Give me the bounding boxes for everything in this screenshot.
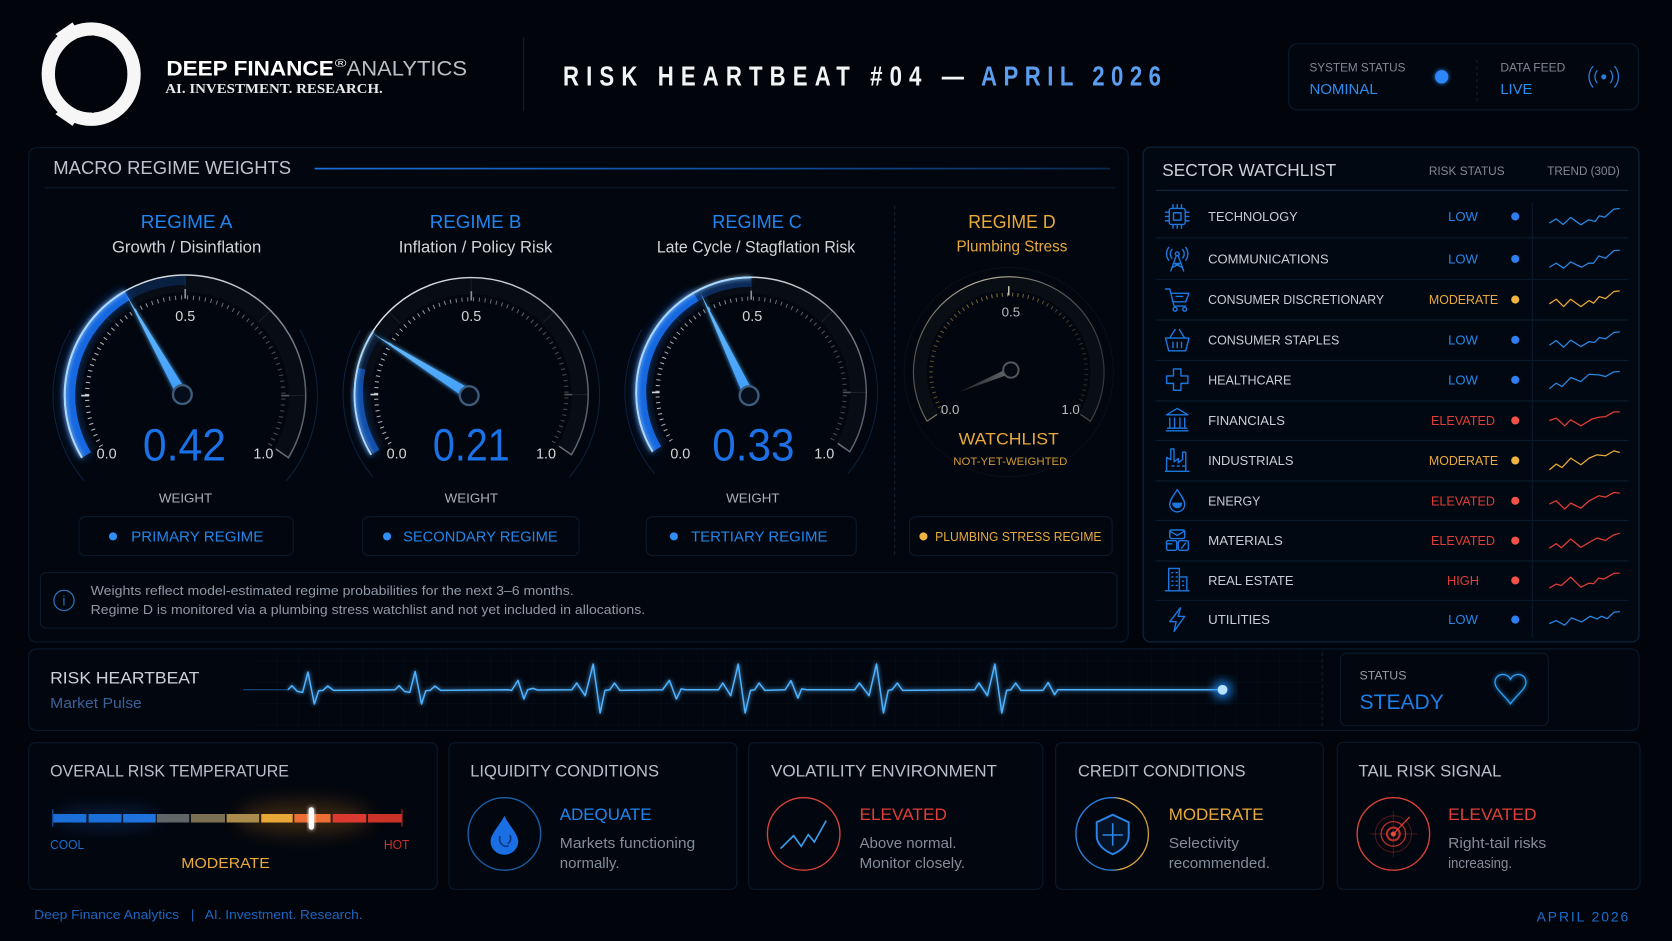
icon: credit shield	[1076, 798, 1148, 870]
gauge: regime D	[904, 212, 1113, 556]
panel: system status: NOMINAL	[1309, 81, 1378, 98]
panel: overall risk temperature: COOL	[50, 837, 84, 852]
row: energy: ENERGY	[1208, 493, 1261, 508]
heading: risk heartbeat: RISK HEARTBEAT	[50, 669, 200, 688]
gauge: regime C: 0.0	[670, 447, 690, 463]
row: technology: TECHNOLOGY	[1208, 209, 1298, 224]
footer: APRIL 2026	[1537, 908, 1629, 924]
row: consumer discretionary	[1165, 289, 1620, 311]
icon: fuel drop	[1170, 489, 1185, 512]
panel: volatility environment	[749, 743, 1043, 889]
note: weights explanation: Weights reflect model-estimated regime probabilities for the next 3–6 months.	[91, 583, 574, 598]
panel: credit conditions	[1056, 743, 1323, 889]
main title	[563, 61, 1161, 92]
chart: ECG pulse trace	[288, 664, 1231, 713]
gauge: regime A: WEIGHT	[159, 490, 212, 505]
panel: sector watchlist: RISK STATUS	[1429, 164, 1505, 178]
row: consumer discretionary: MODERATE	[1429, 292, 1498, 307]
brand wordmark: ®	[335, 58, 347, 70]
row: communications: LOW	[1448, 252, 1478, 267]
panel: volatility environment: VOLATILITY ENVIRONMENT	[771, 761, 997, 780]
icon: info: i	[62, 593, 66, 609]
footer	[34, 907, 1629, 924]
icon: heart	[1495, 674, 1526, 704]
chart: temperature bar	[53, 802, 402, 834]
panel: credit conditions: MODERATE	[1169, 805, 1264, 824]
row: materials: MATERIALS	[1208, 533, 1283, 548]
gauge: regime B: 0.0	[387, 447, 407, 463]
panel: overall risk temperature: OVERALL RISK TEMPERATURE	[50, 761, 289, 780]
panel: credit conditions: Selectivity	[1169, 835, 1240, 852]
icon: buildings	[1165, 568, 1189, 591]
panel: liquidity conditions: LIQUIDITY CONDITIONS	[470, 761, 659, 780]
icon: material blocks	[1167, 530, 1188, 550]
gauge: regime B: Inflation / Policy Risk	[399, 238, 553, 257]
panel: tail risk signal: TAIL RISK SIGNAL	[1358, 761, 1501, 780]
row: industrials: INDUSTRIALS	[1208, 453, 1293, 468]
row: consumer discretionary: CONSUMER DISCRETIONARY	[1208, 292, 1385, 307]
gauge: regime B: REGIME B	[430, 212, 521, 232]
gauge: regime C: WEIGHT	[726, 490, 780, 505]
header: logo	[48, 22, 134, 126]
row: technology	[1165, 205, 1620, 228]
gauge: regime D: Plumbing Stress	[956, 239, 1067, 256]
panel: volatility environment: Monitor closely.	[859, 855, 965, 872]
gauge: regime A: 1.0	[253, 447, 273, 463]
gauge: regime C: REGIME C	[712, 212, 802, 232]
note: weights explanation: Regime D is monitored via a plumbing stress watchlist and not yet included in allocations.	[91, 602, 645, 617]
row: materials: ELEVATED	[1431, 533, 1495, 548]
panel: liquidity conditions: Markets functioning	[560, 835, 695, 852]
row: consumer staples: CONSUMER STAPLES	[1208, 332, 1339, 347]
note: weights explanation	[41, 573, 1117, 628]
row: financials: ELEVATED	[1431, 413, 1495, 428]
panel: system status: SYSTEM STATUS	[1309, 60, 1405, 74]
row: energy: ELEVATED	[1431, 493, 1495, 508]
gauge: regime C: 0.5	[742, 309, 762, 325]
icon: factory	[1165, 449, 1189, 471]
icon: target	[1357, 798, 1430, 870]
panel: tail risk signal: increasing.	[1448, 855, 1512, 872]
row: consumer staples: LOW	[1448, 332, 1478, 347]
row: technology: LOW	[1448, 209, 1478, 224]
gauge: regime D: REGIME D	[968, 212, 1056, 232]
status: steady: STATUS	[1360, 668, 1406, 682]
icon: medical cross	[1167, 369, 1188, 390]
icon: cart	[1165, 289, 1189, 311]
row: healthcare	[1167, 369, 1620, 390]
panel: credit conditions: CREDIT CONDITIONS	[1078, 761, 1245, 780]
gauge: regime B	[343, 212, 600, 556]
row: real estate	[1165, 568, 1620, 591]
gauge: regime B: SECONDARY REGIME	[403, 529, 558, 546]
row: financials	[1167, 408, 1620, 431]
row: communications	[1167, 247, 1620, 271]
row: real estate: REAL ESTATE	[1208, 573, 1293, 588]
gauge: regime A: 0.42	[143, 419, 226, 471]
panel: sector watchlist: SECTOR WATCHLIST	[1162, 160, 1336, 180]
gauge: regime D: PLUMBING STRESS REGIME	[935, 529, 1102, 544]
panel: macro regime weights	[29, 148, 1128, 642]
icon: chip	[1165, 205, 1189, 228]
panel: risk heartbeat	[29, 649, 1639, 730]
footer: |	[191, 907, 194, 922]
status: steady	[1340, 653, 1548, 726]
gauge: regime A: 0.0	[97, 447, 117, 463]
icon: tower	[1167, 247, 1188, 271]
gauge: regime D: WATCHLIST	[959, 430, 1059, 449]
panel: system status: LIVE	[1500, 81, 1532, 98]
row: industrials	[1165, 449, 1620, 471]
footer: Deep Finance Analytics	[34, 907, 179, 922]
row: consumer staples	[1165, 330, 1620, 351]
panel: overall risk temperature: HOT	[384, 837, 410, 852]
icon: liquidity drop	[468, 798, 541, 870]
gauge: regime A: PRIMARY REGIME	[131, 529, 263, 546]
panel: tail risk signal: Right-tail risks	[1448, 835, 1546, 852]
main title: RISK HEARTBEAT #04 —	[563, 61, 965, 92]
panel: overall risk temperature	[29, 743, 437, 889]
row: real estate: HIGH	[1447, 573, 1479, 588]
panel: system status	[1289, 44, 1638, 110]
gauge: regime B: WEIGHT	[445, 490, 498, 505]
status: steady: STEADY	[1360, 690, 1444, 714]
panel: liquidity conditions: ADEQUATE	[560, 805, 652, 824]
gauge: regime A: 0.5	[175, 309, 195, 325]
row: utilities: LOW	[1448, 612, 1478, 627]
panel: liquidity conditions: normally.	[560, 855, 620, 872]
row: utilities	[1170, 608, 1620, 631]
row: energy	[1170, 489, 1620, 512]
icon: volatility line	[767, 798, 840, 870]
panel: system status: DATA FEED	[1500, 60, 1566, 74]
gauge: regime D: 0.0	[941, 402, 959, 417]
gauge: regime A: Growth / Disinflation	[112, 238, 261, 257]
row: financials: FINANCIALS	[1208, 413, 1285, 428]
footer: AI. Investment. Research.	[205, 907, 363, 922]
panel: liquidity conditions	[449, 743, 737, 889]
icon: basket	[1165, 330, 1189, 351]
gauge: regime C: 1.0	[814, 447, 834, 463]
icon: live signal	[1589, 66, 1618, 87]
row: communications: COMMUNICATIONS	[1208, 252, 1329, 267]
row: industrials: MODERATE	[1429, 453, 1498, 468]
panel: sector watchlist	[1143, 147, 1639, 642]
gauge: regime A	[53, 212, 317, 556]
row: healthcare: HEALTHCARE	[1208, 372, 1291, 387]
brand wordmark: AI. INVESTMENT. RESEARCH.	[165, 81, 383, 96]
brand wordmark	[165, 57, 467, 96]
heading: macro regime weights: MACRO REGIME WEIGHTS	[53, 158, 291, 178]
gauge: regime A: REGIME A	[141, 212, 233, 232]
brand wordmark: DEEP FINANCE	[166, 57, 334, 81]
icon: lightning bolt	[1170, 608, 1185, 631]
panel: credit conditions: recommended.	[1169, 855, 1270, 872]
gauge: regime B: 0.5	[461, 309, 481, 325]
icon: bank	[1167, 408, 1188, 431]
heading: risk heartbeat: Market Pulse	[50, 695, 142, 712]
gauge: regime B: 0.21	[433, 419, 510, 471]
panel: overall risk temperature: MODERATE	[181, 855, 270, 872]
row: healthcare: LOW	[1448, 372, 1478, 387]
row: utilities: UTILITIES	[1208, 612, 1270, 627]
panel: tail risk signal: ELEVATED	[1448, 805, 1537, 824]
gauge: regime C: TERTIARY REGIME	[691, 529, 828, 546]
gauge: regime D: 0.5	[1002, 305, 1020, 320]
brand wordmark: ANALYTICS	[347, 57, 467, 81]
gauge: regime C	[625, 212, 878, 556]
main title: APRIL 2026	[981, 61, 1161, 92]
panel: volatility environment: ELEVATED	[859, 805, 947, 824]
gauge: regime C: Late Cycle / Stagflation Risk	[657, 238, 856, 257]
panel: tail risk signal	[1337, 742, 1640, 889]
panel: sector watchlist: TREND (30D)	[1547, 164, 1620, 178]
gauge: regime D: NOT-YET-WEIGHTED	[953, 456, 1067, 468]
row: materials	[1167, 530, 1620, 550]
heading: risk heartbeat	[50, 669, 200, 712]
gauge: regime C: 0.33	[712, 419, 794, 471]
gauge: regime D: 1.0	[1061, 402, 1080, 417]
gauge: regime B: 1.0	[536, 447, 556, 463]
icon: info	[54, 590, 74, 611]
panel: volatility environment: Above normal.	[859, 835, 956, 852]
